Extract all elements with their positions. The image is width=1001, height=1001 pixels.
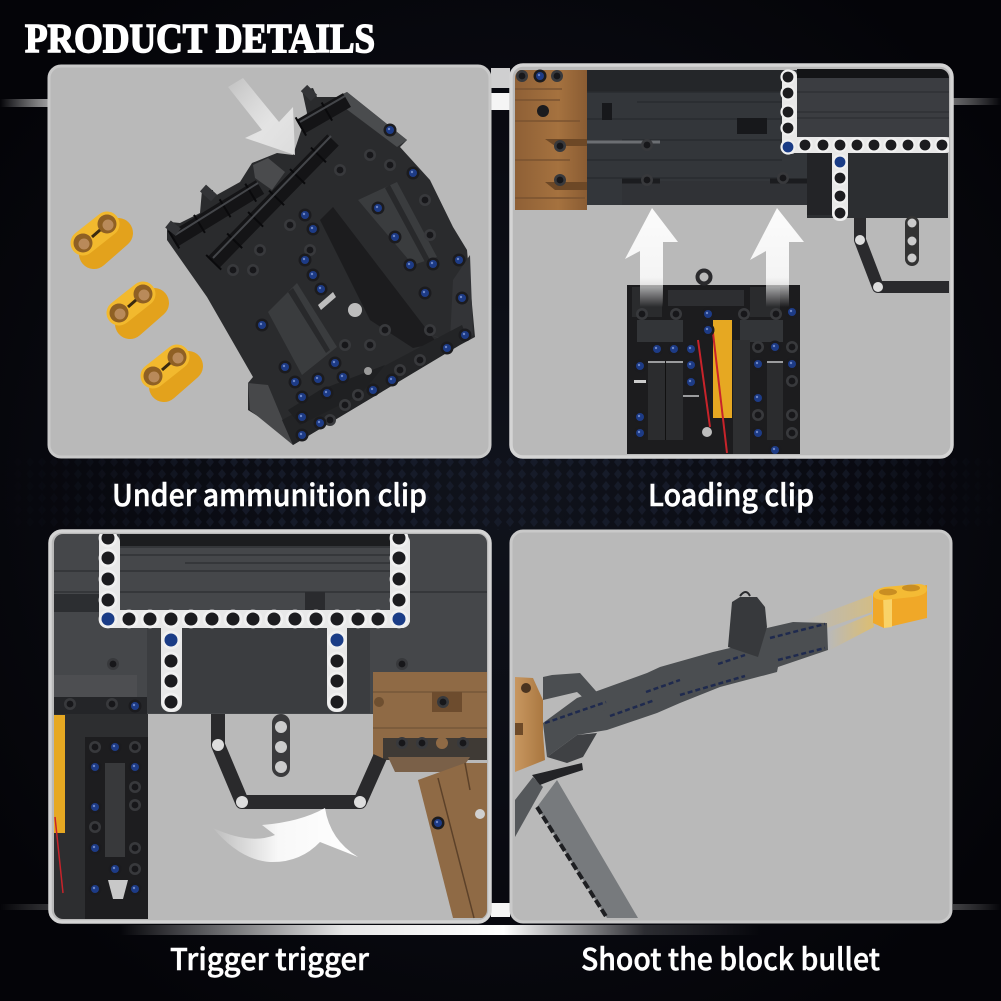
- caption: loading clip: Loading clip: [648, 471, 814, 515]
- caption: shoot the block bullet: Shoot the block bullet: [581, 935, 880, 979]
- bullet trails: [817, 595, 874, 648]
- brown stock: [515, 70, 587, 210]
- gun body: [587, 69, 949, 218]
- arrow: pointing into clip: [228, 78, 295, 155]
- clip in grip: [54, 698, 148, 919]
- caption: under ammunition clip: Under ammunition clip: [112, 471, 427, 515]
- trigger mechanism: [855, 216, 950, 292]
- caption: trigger trigger: Trigger trigger: [170, 935, 370, 979]
- gun body: [54, 534, 487, 714]
- panel: shoot the block bullet: [511, 531, 951, 922]
- icon: flying yellow block bullet: [873, 584, 927, 628]
- arrows: loading up: [625, 208, 804, 307]
- title: PRODUCT DETAILS: [25, 15, 375, 61]
- gun: [515, 592, 828, 918]
- icon: three yellow block bullets: [74, 214, 188, 387]
- trigger mechanism: [212, 714, 380, 808]
- arrow: curved trigger pull: [213, 808, 358, 862]
- white beams: [780, 69, 952, 221]
- panel: loading clip: [511, 65, 952, 457]
- panel: under ammunition clip: [49, 66, 490, 457]
- panel: trigger: [50, 529, 490, 922]
- brown stock and leg: [373, 672, 487, 918]
- ammunition clip: [627, 270, 800, 456]
- ammunition clip model: [167, 88, 475, 445]
- white beams: [99, 529, 410, 712]
